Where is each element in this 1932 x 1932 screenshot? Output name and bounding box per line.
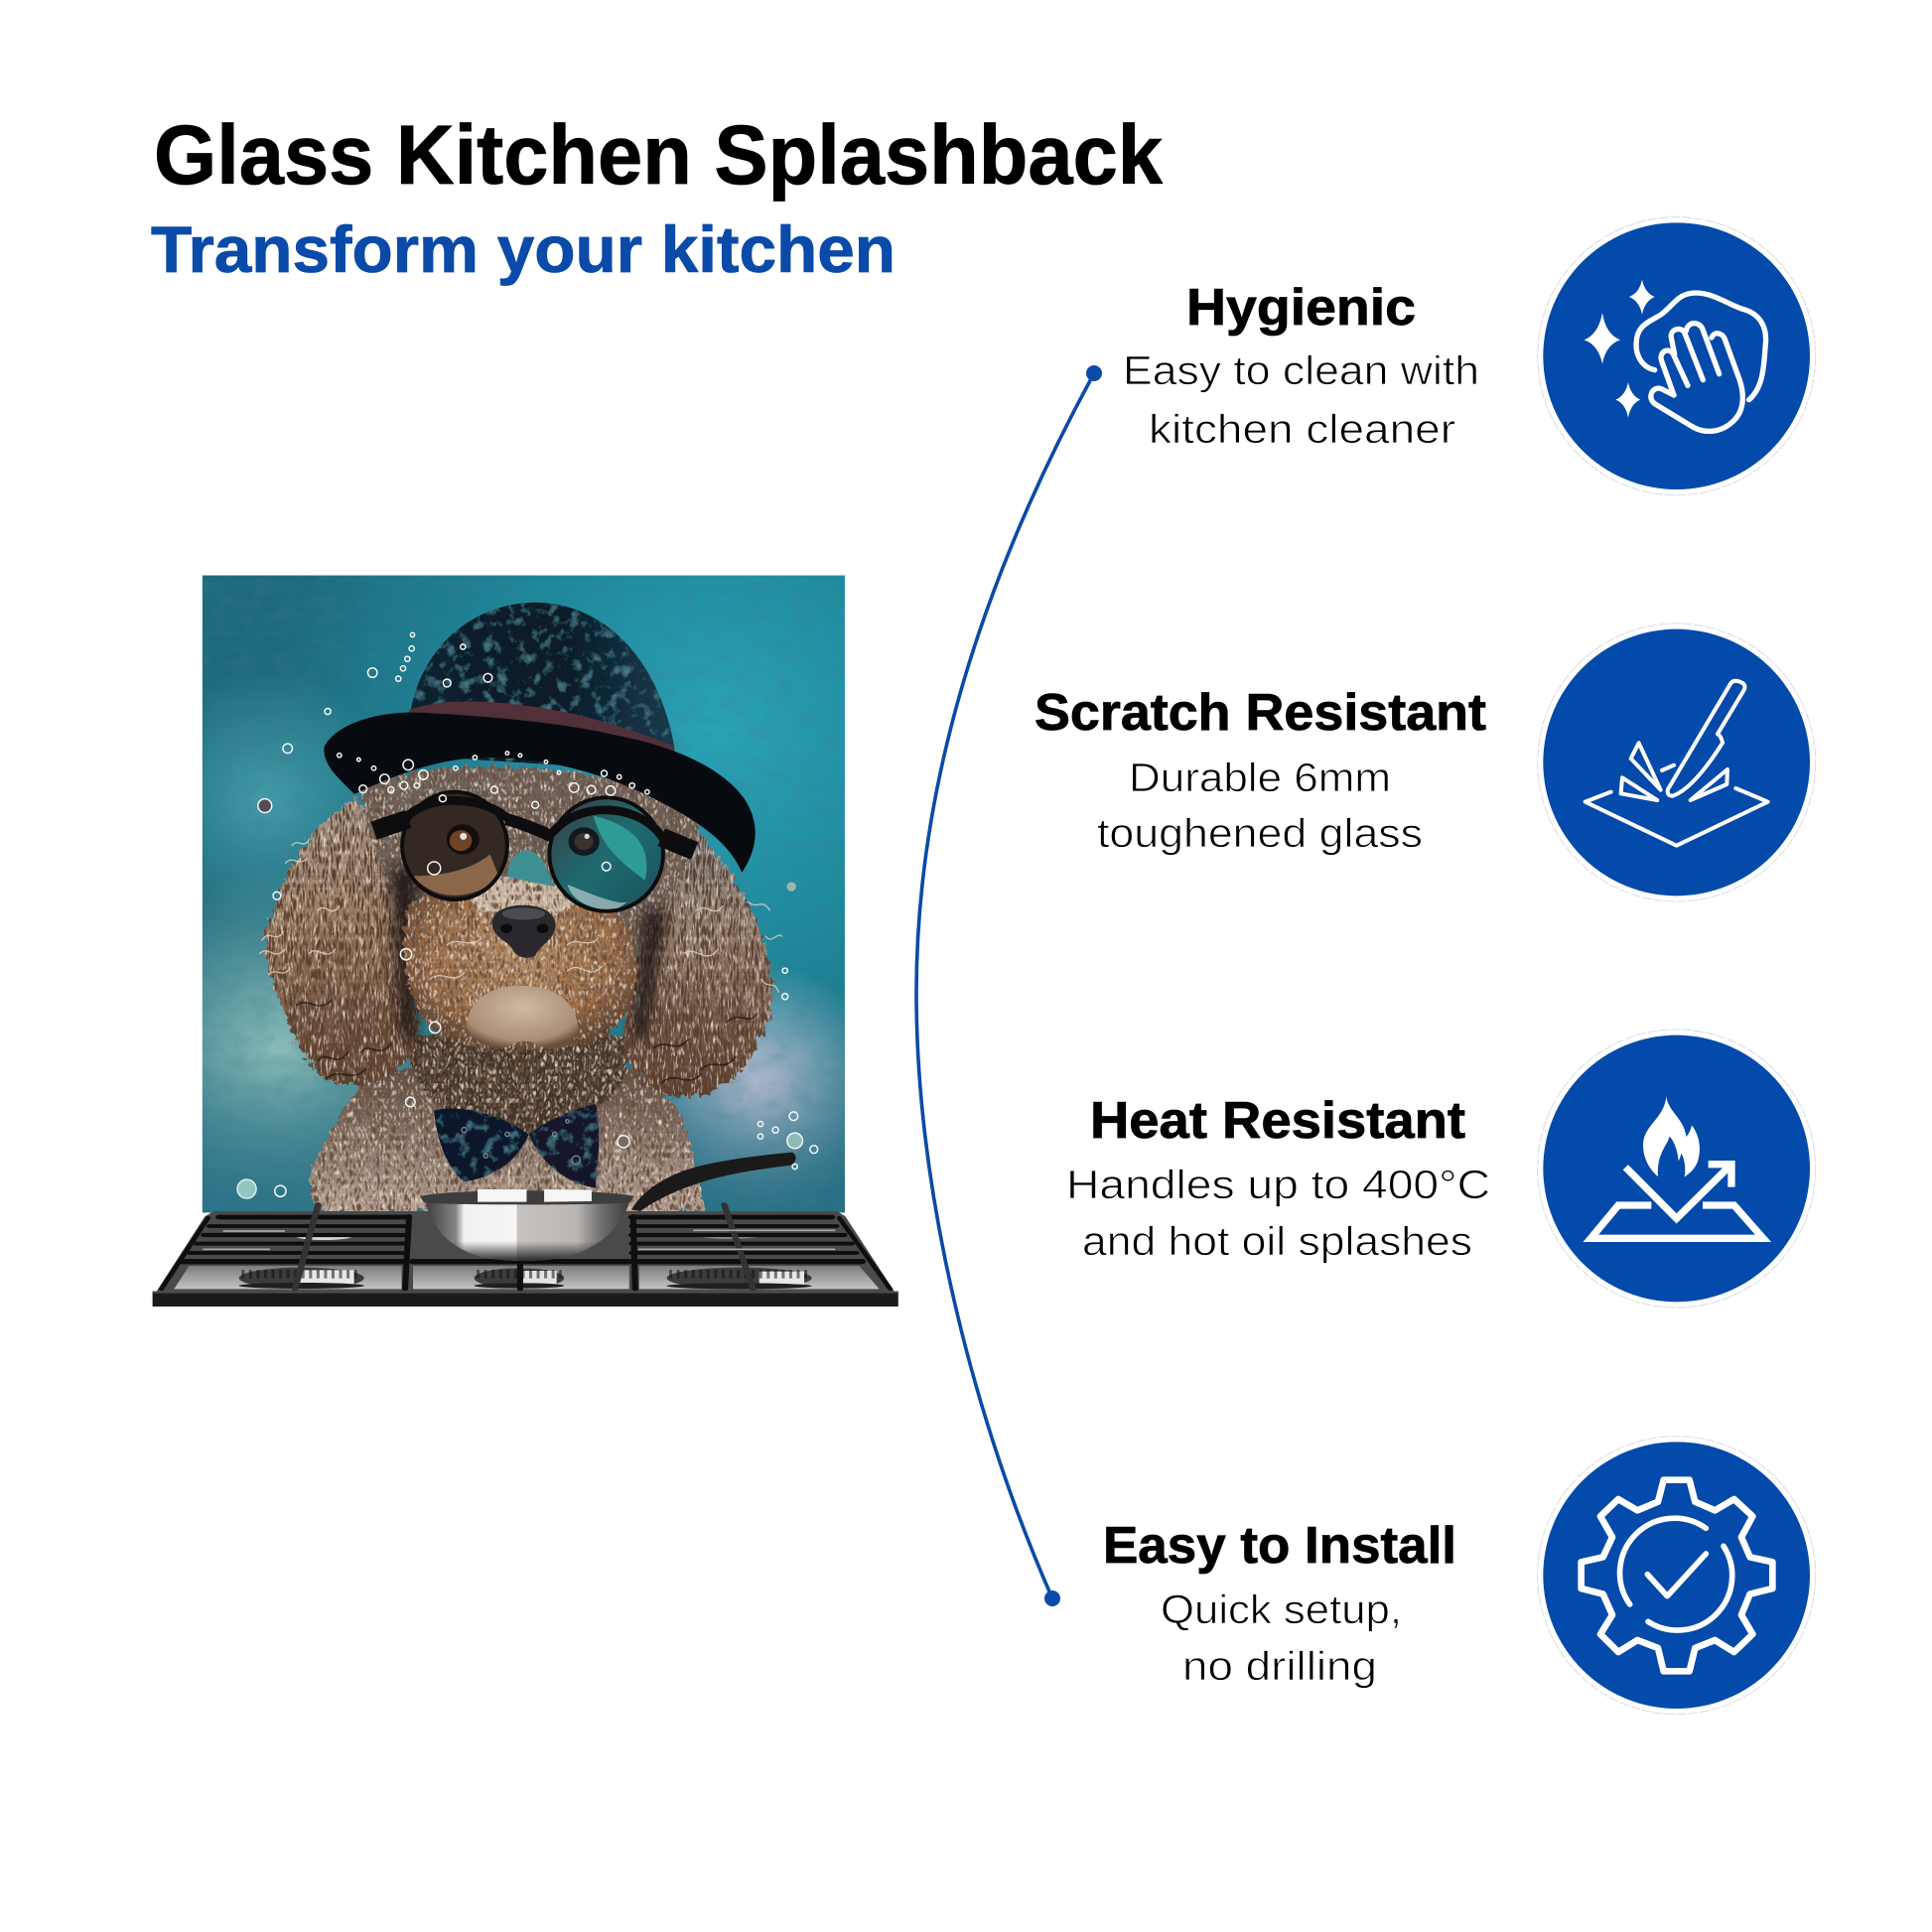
heading: Scratch Resistant	[1035, 684, 1486, 742]
head top	[360, 766, 697, 945]
icon: knife scratching surface	[1538, 623, 1816, 901]
hat band	[409, 702, 674, 768]
gas hob	[153, 1204, 898, 1307]
description	[1161, 1587, 1402, 1689]
title: Glass Kitchen Splashback	[154, 108, 1163, 202]
description	[1123, 347, 1479, 452]
description: Quick setup,	[1161, 1587, 1402, 1632]
description: Durable 6mm	[1129, 755, 1391, 800]
right lens	[549, 797, 663, 911]
nose	[492, 905, 556, 958]
icon: flame over surface with arrow	[1538, 1030, 1816, 1308]
subtitle: Transform your kitchen	[151, 212, 896, 286]
forehead light fur	[471, 877, 578, 918]
gas burners	[239, 1233, 812, 1289]
muzzle fur	[404, 882, 637, 1050]
connector end dot	[1044, 1590, 1060, 1606]
bow tie	[434, 1104, 599, 1188]
left lens	[402, 792, 507, 899]
description: Easy to clean with	[1123, 347, 1479, 393]
water bubbles	[237, 632, 818, 1198]
feature: scratch resistant	[1035, 684, 1486, 856]
burner wells	[174, 1266, 880, 1289]
heading: Easy to Install	[1103, 1517, 1456, 1575]
feature: heat resistant	[1066, 1092, 1490, 1264]
artwork panel	[203, 576, 845, 1212]
description	[1066, 1162, 1490, 1264]
hat brim	[324, 712, 756, 873]
description: kitchen cleaner	[1149, 406, 1455, 452]
chin	[467, 986, 578, 1048]
heading: Hygienic	[1186, 279, 1416, 337]
product image: splashback with dog artwork	[153, 576, 898, 1307]
dog neck	[404, 1035, 632, 1134]
saucepan	[420, 1153, 796, 1261]
icon: gear with check mark	[1538, 1437, 1816, 1715]
description: no drilling	[1182, 1643, 1377, 1689]
lens reflections and eyes	[413, 816, 646, 910]
feature: easy to install	[1103, 1517, 1456, 1689]
description: Handles up to 400°C	[1066, 1162, 1490, 1207]
right ear	[623, 824, 772, 1097]
description	[1097, 755, 1423, 856]
left ear	[266, 798, 417, 1084]
connector curve	[916, 365, 1102, 1606]
hat crown	[410, 603, 674, 772]
pan rim	[420, 1190, 634, 1204]
feature: hygienic	[1123, 279, 1479, 452]
connector start dot	[1086, 365, 1102, 381]
loose fur strands	[260, 839, 782, 1082]
heading: Heat Resistant	[1090, 1092, 1465, 1150]
dog body	[309, 1069, 705, 1212]
description: and hot oil splashes	[1082, 1218, 1472, 1264]
glasses frame	[373, 792, 695, 911]
description: toughened glass	[1097, 810, 1423, 856]
pan handle	[631, 1153, 796, 1211]
pan bowl	[425, 1199, 630, 1261]
ear shadows	[391, 868, 666, 1043]
hob front edge	[153, 1292, 898, 1307]
grates	[162, 1204, 891, 1289]
icon: hand wiping with sparkles	[1538, 217, 1816, 495]
